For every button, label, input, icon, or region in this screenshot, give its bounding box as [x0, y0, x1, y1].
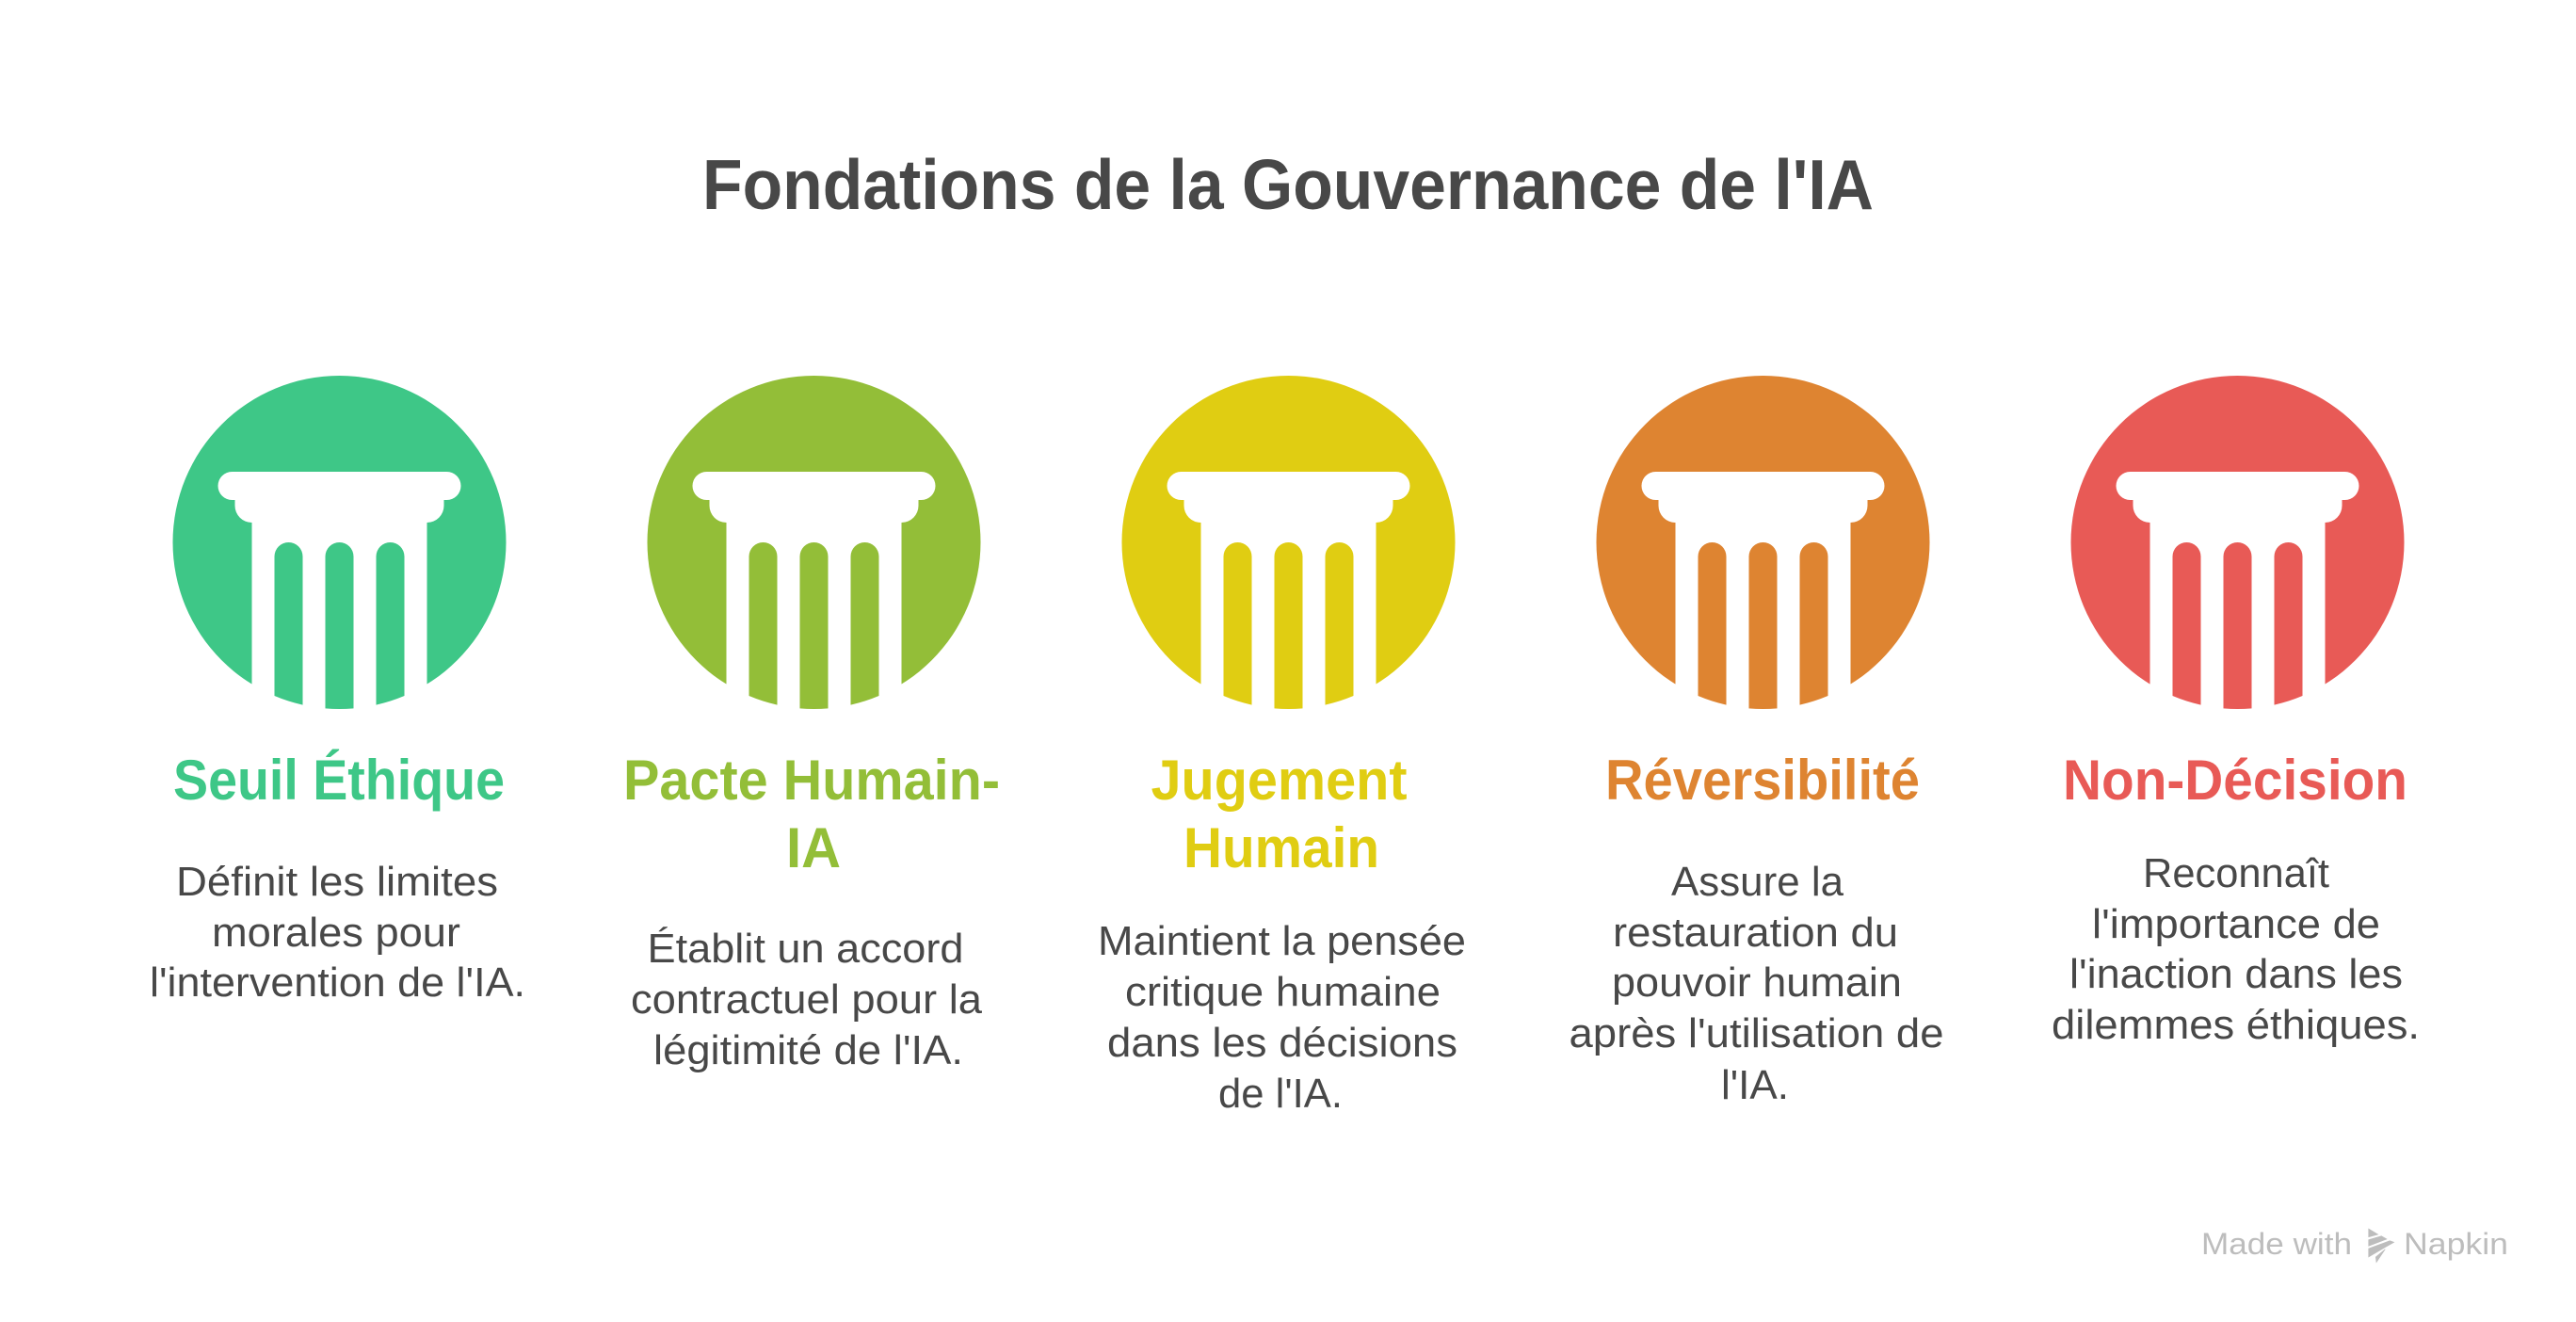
icon: yellow pillar [1122, 376, 1456, 710]
description: Seuil Éthique: Définit les limites [176, 859, 498, 905]
panel: Pacte Humain-IA [623, 376, 1000, 1073]
description: Seuil Éthique: morales pour [212, 910, 460, 956]
description: Réversibilité [1569, 859, 1943, 1108]
description: Réversibilité: pouvoir humain [1612, 959, 1902, 1006]
panel: Non-Décision [2052, 376, 2420, 1048]
description: Non-Décision: l'inaction dans les [2069, 951, 2403, 997]
heading: Seuil Éthique: Seuil Éthique [173, 749, 505, 812]
description: Jugement Humain: de l'IA. [1218, 1071, 1343, 1117]
description: Pacte Humain-IA [631, 926, 983, 1073]
heading: Jugement Humain: Humain [1183, 816, 1379, 879]
icon: lime pillar [648, 376, 981, 710]
icon: Napkin logo [2369, 1229, 2394, 1263]
description: Jugement Humain: critique humaine [1125, 969, 1441, 1015]
heading: Pacte Humain-IA: IA [786, 816, 841, 879]
description: Seuil Éthique [150, 859, 525, 1006]
description: Jugement Humain: Maintient la pensée [1098, 918, 1466, 964]
heading: Pacte Humain-IA [623, 749, 1000, 879]
description: Seuil Éthique: l'intervention de l'IA. [150, 959, 525, 1006]
description: Pacte Humain-IA: Établit un accord [648, 926, 964, 972]
footer: Made with Napkin: Made with [2201, 1227, 2352, 1261]
panel: Jugement Humain [1098, 376, 1466, 1117]
description: Réversibilité: l'IA. [1721, 1062, 1789, 1108]
icon: green pillar [173, 376, 507, 710]
title: Fondations de la Gouvernance de l'IA [702, 145, 1874, 224]
description: Réversibilité: Assure la [1671, 859, 1844, 905]
icon: orange pillar [1597, 376, 1930, 710]
description: Pacte Humain-IA: contractuel pour la [631, 976, 983, 1023]
icon: red pillar [2071, 376, 2405, 710]
panel: Réversibilité [1569, 376, 1943, 1108]
description: Réversibilité: restauration du [1613, 910, 1898, 956]
description: Non-Décision: Reconnaît [2143, 850, 2329, 896]
wordmark: Napkin: Napkin [2404, 1227, 2508, 1261]
heading: Jugement Humain [1151, 749, 1408, 879]
description: Jugement Humain: dans les décisions [1107, 1020, 1457, 1066]
description: Non-Décision: dilemmes éthiques. [2052, 1002, 2420, 1048]
heading: Jugement Humain: Jugement [1151, 749, 1408, 812]
description: Pacte Humain-IA: légitimité de l'IA. [653, 1027, 963, 1073]
heading: Pacte Humain-IA: Pacte Humain- [623, 749, 1000, 812]
panel: Seuil Éthique [150, 376, 525, 1006]
footer: Made with Napkin [2201, 1227, 2508, 1263]
description: Non-Décision [2052, 850, 2420, 1048]
description: Non-Décision: l'importance de [2092, 901, 2380, 947]
heading: Non-Décision: Non-Décision [2063, 749, 2407, 812]
description: Jugement Humain [1098, 918, 1466, 1117]
heading: Réversibilité: Réversibilité [1605, 749, 1920, 812]
description: Réversibilité: après l'utilisation de [1569, 1010, 1943, 1056]
